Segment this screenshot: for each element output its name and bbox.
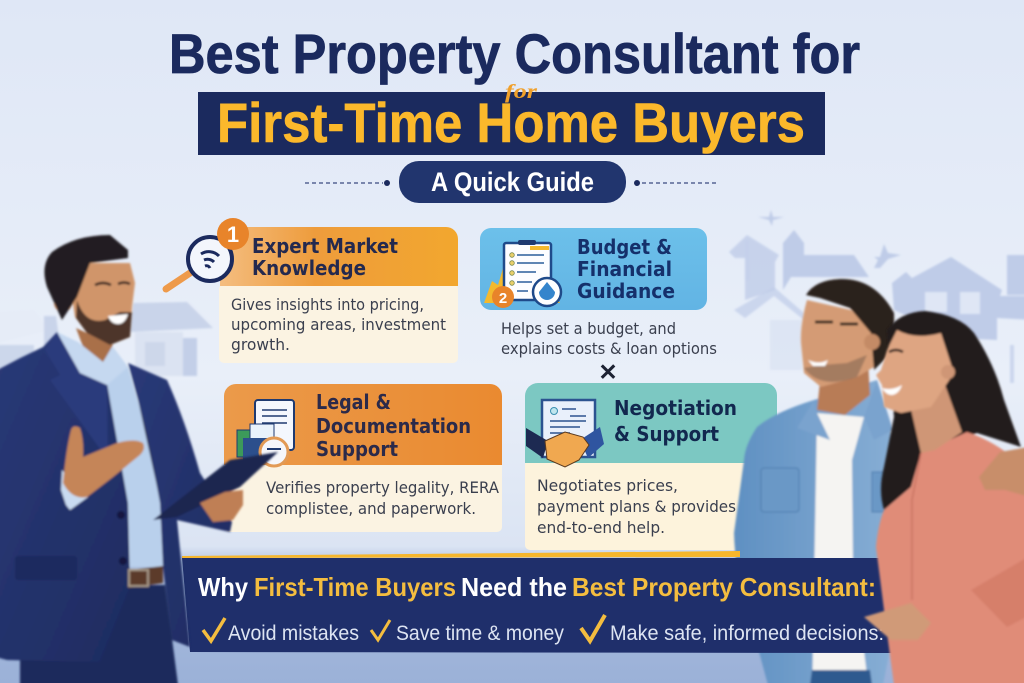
badge: 2 [492, 286, 514, 308]
neck [910, 385, 962, 453]
description: growth. [231, 335, 290, 354]
heading: Financial [577, 257, 672, 281]
heading: Expert Market [252, 234, 398, 258]
panel: budget and financial guidance [480, 228, 717, 358]
skyline: left houses [0, 302, 213, 377]
panel: expert market knowledge [166, 218, 458, 363]
heading: Documentation [316, 414, 471, 438]
description: upcoming areas, investment [231, 315, 446, 334]
hair [881, 311, 1021, 510]
collar [57, 332, 128, 385]
tablet [153, 452, 278, 520]
heading: Budget & [577, 235, 672, 259]
heading: Negotiation [614, 396, 737, 420]
description: complistee, and paperwork. [266, 499, 476, 518]
neck [76, 328, 113, 364]
skyline: right houses [729, 210, 1024, 383]
badge: 1: 1 [227, 222, 239, 247]
consultant man [0, 235, 278, 683]
heading: Knowledge [252, 256, 366, 280]
description: Gives insights into pricing, [231, 295, 424, 314]
hand on shoulder [979, 445, 1024, 500]
description: Negotiates prices, [537, 476, 678, 495]
bottom banner [182, 558, 892, 653]
banner heading: Need the [461, 572, 567, 602]
woman client [864, 311, 1024, 683]
description: explains costs & loan options [501, 339, 717, 358]
clasped hand [864, 603, 931, 640]
face [876, 330, 954, 413]
title banner [198, 91, 825, 155]
banner heading: First-Time Buyers [254, 572, 456, 602]
check item: avoid mistakes [203, 618, 359, 645]
description: payment plans & provides [537, 497, 736, 516]
icon: clipboard [484, 240, 561, 306]
panel: legal and documentation support [224, 384, 502, 532]
jacket right and sleeve [128, 363, 232, 647]
right hand [200, 490, 243, 522]
check item: make safe decisions: Make safe, informed decisions: [610, 622, 884, 645]
check item: save time and money: Save time & money [396, 622, 564, 645]
close mark: ✕ [598, 359, 618, 385]
description: Helps set a budget, and [501, 319, 676, 338]
subtitle pill [399, 161, 626, 203]
title line 2: First-Time Home Buyers [217, 91, 805, 154]
badge: 1 [217, 218, 249, 250]
description: end-to-end help. [537, 518, 665, 537]
small word: for: for [505, 81, 537, 103]
heading: Support [316, 437, 398, 461]
banner heading: Why [198, 572, 248, 602]
badge: 2: 2 [499, 290, 507, 307]
subtitle pill: A Quick Guide [431, 167, 594, 197]
title line 1: Best Property Consultant for [169, 22, 860, 85]
dotted divider right [634, 180, 717, 186]
lapel [45, 332, 108, 460]
description: Verifies property legality, RERA [266, 478, 499, 497]
heading: Legal & [316, 390, 391, 414]
icon: documents [237, 400, 294, 466]
heading: & Support [614, 422, 719, 446]
icon: contract and handshake [526, 400, 604, 467]
head [44, 235, 135, 345]
heading: Guidance [577, 279, 675, 303]
jacket left [0, 332, 130, 662]
gold line [0, 551, 740, 558]
belt [128, 566, 163, 588]
check item: make safe decisions [581, 615, 884, 645]
trousers [20, 585, 180, 683]
blouse [876, 432, 1024, 683]
check item: avoid mistakes: Avoid mistakes [228, 622, 359, 645]
man client: head [801, 279, 894, 415]
dotted divider left [305, 180, 390, 186]
banner heading: Best Property Consultant: [572, 572, 876, 602]
raised hand [61, 426, 144, 510]
man client: denim and tee [734, 279, 905, 683]
shirt [80, 347, 163, 567]
panel: negotiation and support [525, 383, 777, 550]
icon: magnifier [166, 237, 232, 289]
